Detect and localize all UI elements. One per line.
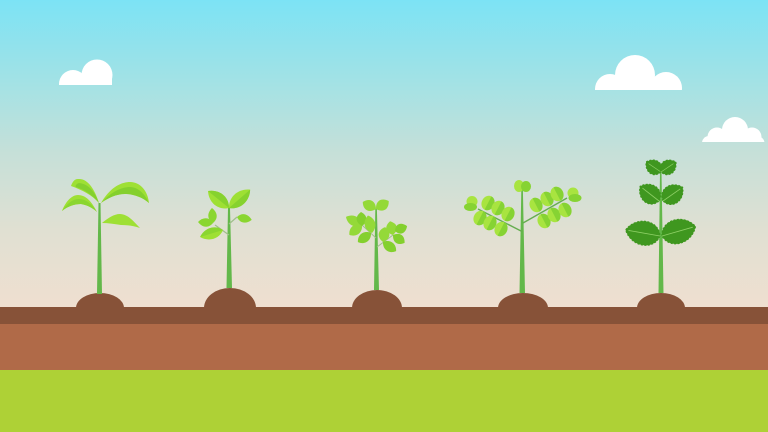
plant 5: mature stem with serrated dark leaves [623,156,699,293]
plant 2: stem with branched leaves [198,185,254,288]
soil mound 4 [498,293,548,308]
sky background [0,0,768,307]
cloud: top right large [595,55,682,90]
plant 1: sprout with curved leaves [62,179,149,294]
cloud: right small [702,117,764,142]
soil mound 3 [352,290,402,308]
soil mound 5 [637,293,685,308]
soil mound 2 [204,288,256,308]
ground: dark soil band [0,307,768,324]
ground: lighter soil band [0,324,768,371]
cloud: top left [59,60,112,85]
soil mound 1 [76,293,124,308]
plant 4: stem with round-leaflet branches [464,180,582,293]
ground: green grass [0,370,768,432]
plant 3: stem with compound leaves [344,197,409,290]
